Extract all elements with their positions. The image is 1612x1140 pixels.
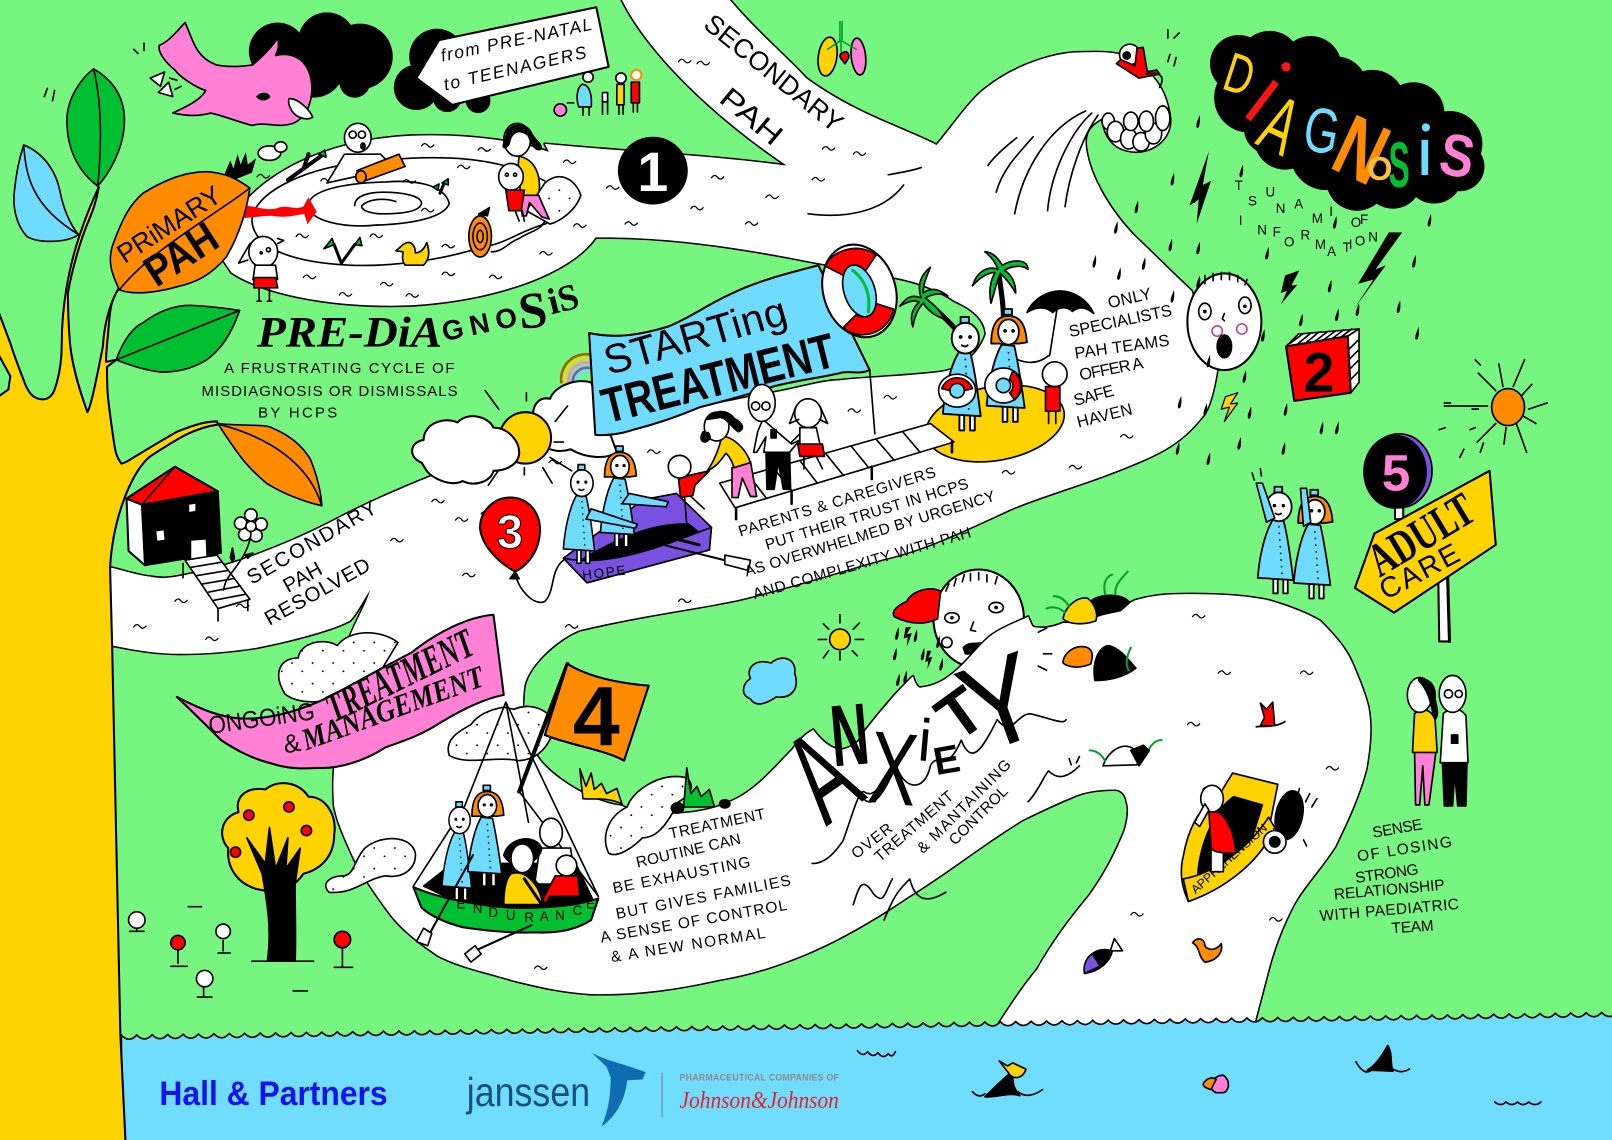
red arrow [242,197,317,224]
pink banner: ongoing treatment & management: & [281,729,303,759]
anxiety heading: Y [942,625,1058,780]
pre-diagnosis text: MISDIAGNOSIS OR DISMISSALS [202,384,458,400]
oar [663,545,725,560]
family with pram [554,70,642,116]
banner: starting treatment: TREATMENT [596,323,841,434]
lightning bolts [1189,151,1402,421]
adult care sign: CARE [1374,538,1465,607]
orange duck [1193,939,1222,962]
text: only specialists [1067,285,1174,432]
diagnosis cloud: S [1389,129,1410,201]
label: secondary PAH resolved: RESOLVED [261,553,374,630]
anxiety heading: T [922,672,998,755]
text: parents and caregivers: PARENTS & CAREGIVERS [736,464,938,540]
text: treatment routine: BUT GIVES FAMILIES [614,872,792,923]
flag 4: 4 [573,669,620,763]
pink banner: ongoing treatment & management [177,615,504,768]
text: treatment routine: & A NEW NORMAL [610,925,767,966]
leaf: primary PAH [110,172,250,296]
anxiety heading: i [915,706,934,774]
river road [110,0,1370,1034]
water creatures [857,1045,1541,1105]
adult care sign [1355,471,1496,641]
wave details and spray lines [808,106,1170,215]
apprehension boat: APPREHENSION [1188,821,1270,897]
diagnosis cloud: A [1246,78,1313,173]
kid in boat [556,855,577,876]
pre-diagnosis heading [256,276,583,356]
sun: orange [1439,360,1547,457]
spiral path lines [252,158,572,265]
person on wave crest [1116,30,1179,87]
logo: Janssen: janssen [466,1069,590,1115]
flower by the house [223,509,267,590]
green hull [413,887,598,933]
girl holding hands [795,399,821,428]
life rings held by nurses [939,368,1022,407]
label: secondary PAH resolved: PAH [279,557,326,598]
nurses on island with rings [939,309,1067,430]
text: treatment routine: A SENSE OF CONTROL [599,897,789,947]
house [127,467,250,621]
text: sense of losing: STRONG [1354,861,1420,887]
mound with palm trees [900,252,1028,334]
branch and leaves [288,154,321,180]
text: tsunami of information: TSUNAMIOF [1235,178,1368,230]
rainbow [561,354,590,382]
adult care sign: ADULT [1358,483,1484,587]
leaf: primary PAH: PRiMARY [111,180,227,269]
elephant flying and black smoke cloud [44,12,393,125]
text: only specialists: SPECIALISTS [1067,302,1174,341]
diagnosis cloud: N [1319,97,1402,204]
banner: starting treatment: STARTing [598,288,792,384]
scared face [1187,272,1261,370]
pre-diagnosis heading: PRE-DiA [256,309,442,356]
text: sense of losing: SENSE [1371,816,1424,842]
number 2 box: 2 [1304,342,1334,404]
logo: Janssen: PHARMACEUTICAL COMPANIES OF [680,1072,839,1082]
water [121,1011,1612,1140]
sign: from pre-natal to teenagers: to TEENAGERS [442,42,589,94]
dad in boat [540,818,562,847]
father [766,448,791,489]
text: parents and caregivers: PUT THEIR TRUST IN HCPS [763,476,971,554]
anxiety heading [760,625,1058,850]
rocks on right river [1047,572,1285,766]
diagnosis cloud: O [1367,150,1392,187]
anxious face with red cloud [893,569,1024,686]
text: treatment routine: ROUTINE CAN [634,831,742,871]
grass and stones [224,152,256,179]
apple tree [222,783,335,961]
text: over treatment [848,756,1015,865]
logo: Janssen: Johnson&Johnson [680,1087,839,1114]
number 1: 1 [637,141,668,203]
pink banner: ongoing treatment & management: MANAGEMENT [296,659,489,757]
text: over treatment: TREATMENT [871,788,958,865]
text: treatment routine [599,806,792,966]
anxiety heading: E [930,737,963,784]
pink banner: ongoing treatment & management: ONGOiNG [207,698,316,740]
people and boat: hope: HOPE [581,563,626,583]
fish [1084,939,1123,973]
anxiety heading: N [827,686,873,786]
small yellow sun [818,615,864,660]
text: only specialists: SAFE [1072,382,1116,410]
pre-diagnosis heading: GNO [439,301,520,347]
text: treatment routine: BE EXHAUSTING [611,854,752,897]
apprehension boat [1181,773,1317,902]
pink banner: ongoing treatment & management: TREATMENT [318,619,482,731]
flowers [129,907,353,997]
rain drops [1093,115,1431,465]
text: tsunami of information [1235,178,1378,259]
text: only specialists: ONLY [1106,285,1153,312]
label: secondary PAH (top): PAH [713,82,789,152]
pre-diagnosis text [202,361,458,421]
text: only specialists: PAH TEAMS [1073,332,1171,363]
number 2 box [1286,329,1359,404]
pier [720,424,954,519]
label: secondary PAH (top): SECONDARY [698,8,849,138]
label: secondary PAH resolved [243,496,381,630]
diagnosis cloud: G [1298,92,1345,169]
diagnosis cloud: S [1435,120,1480,191]
black cloud [249,12,393,98]
leaf: green top [67,69,124,186]
nurses in boat [563,465,595,563]
anxiety heading: X [864,709,922,828]
leaf: green lower [116,305,240,372]
grass and rocks [580,768,730,813]
text: tsunami of information: INFORMATION [1239,213,1378,259]
sun: yellow [485,391,572,485]
sprouts [334,245,355,263]
leaf: blue [14,145,78,241]
text: parents and caregivers: AS OVERWHELMED BY URGENCY [743,488,997,581]
scientist with scroll [327,154,396,183]
diagnosis cloud: I [1234,67,1290,135]
people and boat: hope [563,384,828,583]
child on island [1042,362,1067,387]
leaf: orange lower [218,424,322,506]
number 1 [618,137,688,205]
label: secondary PAH resolved: SECONDARY [243,496,381,589]
text: over treatment: OVER [848,820,896,863]
pre-diagnosis heading: S [516,281,550,341]
sailboat endurance [413,702,598,962]
oars [430,855,473,933]
text: sense of losing [1319,816,1460,937]
sign: from pre-natal to teenagers [394,7,609,113]
text: over treatment: CONTROL [946,783,1012,849]
sailboat endurance: ENDURANCE [456,897,595,925]
small water ripples on road [134,59,1338,970]
waving nurses [1252,469,1333,599]
child climbing [685,497,704,524]
anxiety wave lines [812,628,1079,920]
tree trunk and branches [0,187,218,1140]
logo: Janssen [466,1053,839,1127]
number 5 sign: 5 [1382,443,1410,501]
text: only specialists: OFFER A [1078,354,1145,384]
text: sense of losing: RELATIONSHIP [1333,877,1445,903]
diagnosis cloud: D [1216,42,1262,109]
pre-diagnosis text: A FRUSTRATING CYCLE OF [224,361,454,377]
number 3 balloon [480,498,563,602]
text: sense of losing: TEAM [1391,917,1434,937]
sign: from pre-natal to teenagers: from PRE-NATAL [439,14,594,66]
elephant [159,23,312,125]
anxiety heading: A [760,703,884,850]
cloud: white right of sun [533,381,617,457]
diagnosis cloud: I [1418,130,1431,186]
diagnosis cloud [1210,31,1484,211]
mum in boat [504,839,542,865]
icon: lungs and heart [816,22,868,77]
small blue cloud [744,658,796,704]
number 5 sign [1363,434,1432,519]
child with telescope [1211,841,1223,872]
foam edge [491,221,545,252]
text: sense of losing: WITH PAEDIATRIC [1319,896,1460,925]
duck [396,242,429,265]
flag 4 [519,664,649,792]
island [920,375,1070,472]
mother [732,462,757,498]
hope boat [563,493,711,583]
spiral characters and objects [224,123,581,301]
umbrella [1018,291,1094,362]
number 3 balloon: 3 [497,506,523,559]
life ring [811,235,908,347]
text: treatment routine: TREATMENT [668,806,767,843]
girl [249,236,278,267]
log [469,216,491,257]
pre-diagnosis heading: iS [543,276,583,323]
pre-diagnosis text: BY HCPS [258,405,337,421]
text: over treatment: & MANTAINING [914,756,1015,857]
leaf: primary PAH: PAH [136,213,227,296]
cloud: white left of sun [412,416,519,484]
text: parents and caregivers [736,464,997,603]
couple [1407,675,1468,806]
logo: Hall & Partners: Hall & Partners [159,1075,388,1113]
text: sense of losing: OF LOSING [1356,834,1453,865]
banner: starting treatment [589,265,875,435]
text: only specialists: HAVEN [1075,400,1134,432]
dotted clouds [279,633,691,892]
text: parents and caregivers: AND COMPLEXITY WITH PAH [751,524,973,603]
mother and child [504,123,531,156]
